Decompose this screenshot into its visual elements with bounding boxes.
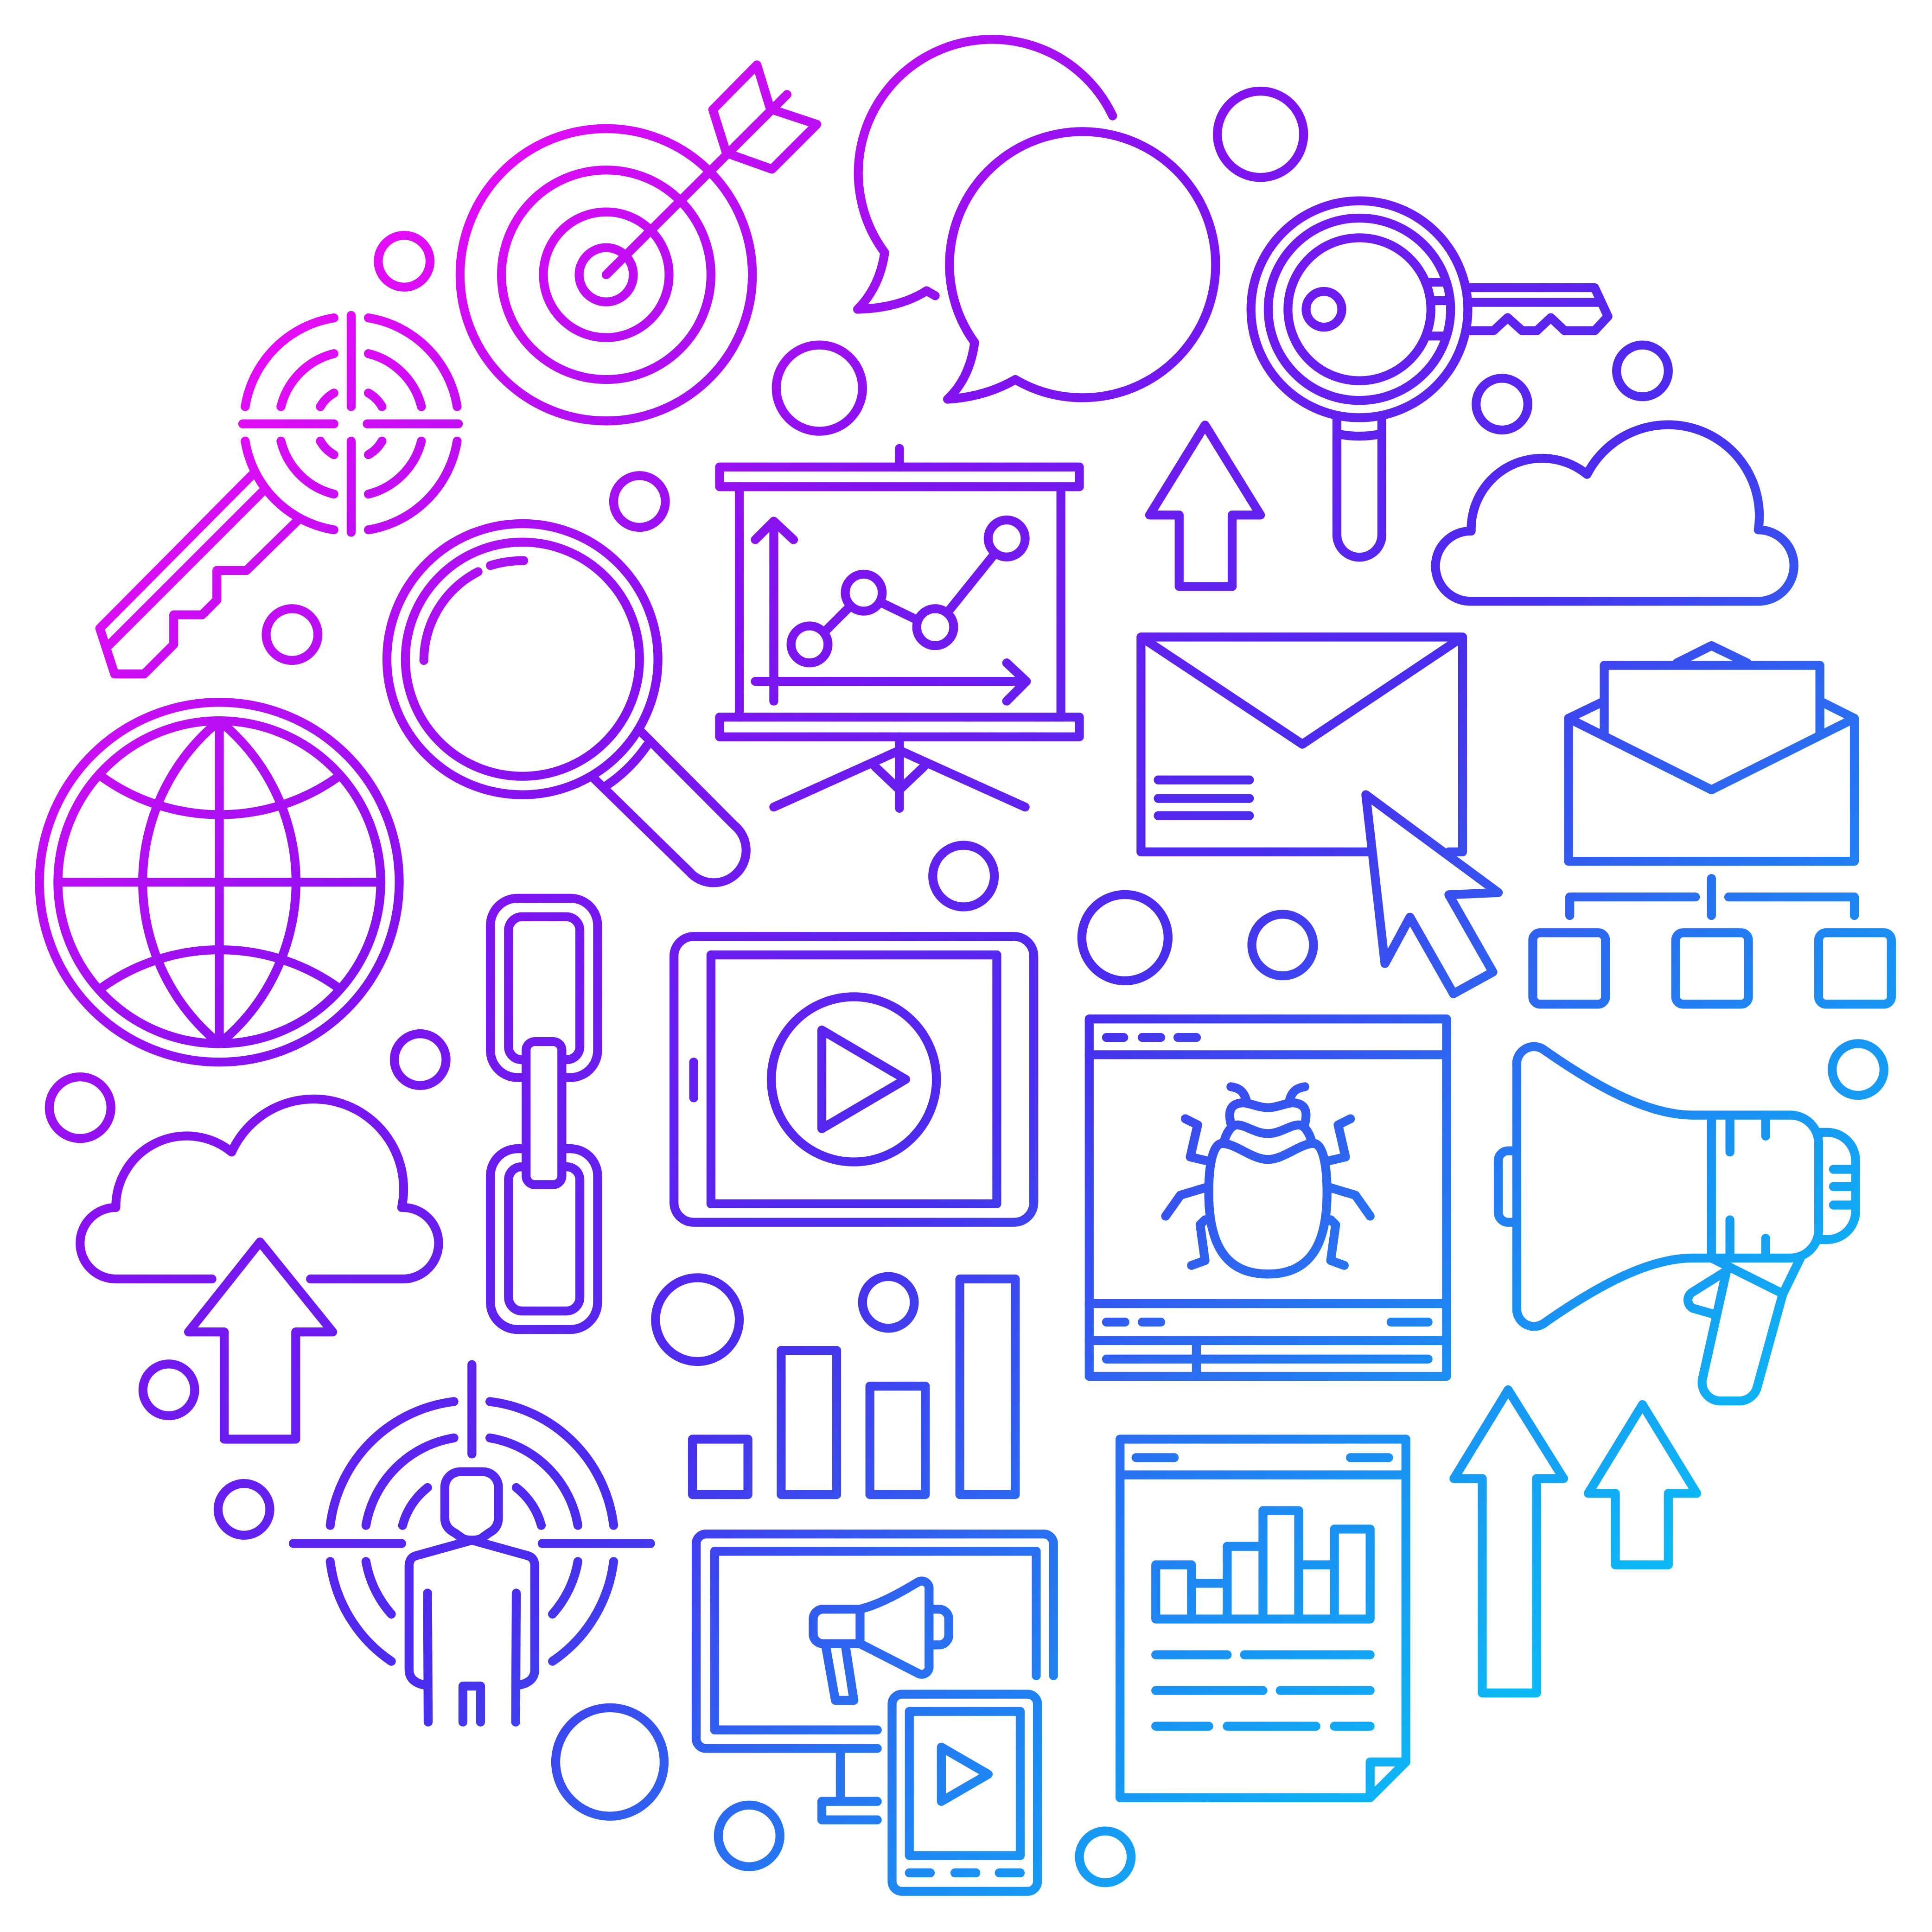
icon: tablet with play button (674, 937, 1034, 1222)
document chart (1156, 1511, 1370, 1619)
icon: presentation board with line chart (720, 448, 1079, 808)
icon: person in target (293, 1365, 650, 1722)
icon: cloud upload (80, 1099, 439, 1439)
key shaft (100, 474, 300, 674)
icon: report document with bar chart (1120, 1439, 1406, 1798)
person body (409, 1540, 535, 1685)
icon: large magnifying glass (387, 523, 746, 883)
icon: up arrow centre (1149, 425, 1261, 587)
icon: organisation hierarchy (1533, 879, 1891, 1004)
arrow shaft and fletching (606, 65, 817, 275)
icon: globe (39, 702, 399, 1062)
icon: open envelope with letter (1569, 646, 1855, 861)
icon: chain link (491, 898, 598, 1329)
icon: monitor with small megaphone (696, 1534, 1053, 1820)
small megaphone (813, 1581, 949, 1700)
person head (445, 1472, 498, 1540)
cursor arrow (1366, 795, 1498, 994)
document text lines (1156, 1655, 1370, 1726)
bar chart (693, 1279, 1015, 1495)
key blade (1429, 282, 1608, 336)
icon: large megaphone (1498, 1046, 1855, 1401)
icon: small tablet with play (892, 1694, 1038, 1891)
chart axes (755, 521, 1027, 701)
icon: browser window with bug (1089, 1019, 1447, 1376)
icon: envelope with cursor (1141, 637, 1498, 994)
icon: cloud top right (1435, 425, 1794, 601)
icon: tall up arrow (1454, 1390, 1563, 1693)
icon: speech bubbles (858, 39, 1216, 399)
bug (1166, 1087, 1370, 1274)
icon: target with arrow (460, 65, 817, 421)
icon: magnifier with key (1251, 201, 1608, 557)
icon: short up arrow (1588, 1405, 1696, 1565)
icon: crosshair key (100, 315, 459, 674)
chart data line (824, 556, 993, 632)
